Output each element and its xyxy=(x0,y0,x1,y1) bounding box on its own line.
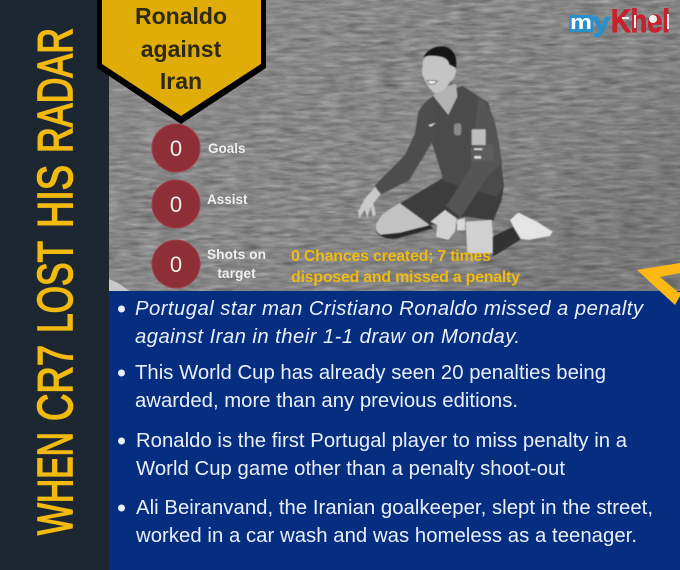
bullet: first Portugal player: World Cup game other than a penalty shoot-out xyxy=(136,458,565,480)
bullet: first Portugal player xyxy=(118,430,628,480)
crest and swoosh xyxy=(454,123,461,135)
logo: myKhel: Khel xyxy=(611,3,670,39)
decorative yellow triangle xyxy=(637,263,680,305)
photo: kneeling Ronaldo xyxy=(358,47,553,257)
bullet: Ronaldo missed a penalty: against Iran in their 1-1 draw on Monday. xyxy=(135,326,520,348)
heading: vertical title: HIS xyxy=(28,165,83,228)
stat: assist xyxy=(152,180,248,228)
photo: grass pitch background xyxy=(109,0,680,292)
bullet: first Portugal player: Ronaldo is the first Portugal player to miss penalty in a xyxy=(136,430,628,452)
pennant: Ronaldo against Iran: against xyxy=(141,36,222,62)
bullet: 20 penalties awarded xyxy=(118,362,606,412)
stat: goals: 0 xyxy=(170,136,182,161)
bullet: 20 penalties awarded: awarded, more than any previous editions. xyxy=(135,390,518,412)
left thigh and knee xyxy=(376,203,430,237)
stat: goals: Goals xyxy=(208,141,246,156)
viewer-right arm xyxy=(446,97,502,217)
stat: goals xyxy=(152,124,246,172)
callout: chances created: 0 Chances created; 7 times xyxy=(291,248,491,265)
pennant: Ronaldo against Iran: Iran xyxy=(160,68,202,94)
bullet: Ali Beiranvand: worked in a car wash and was homeless as a teenager. xyxy=(135,525,637,547)
callout: chances created xyxy=(291,248,520,286)
torso xyxy=(418,86,504,197)
bullet: Ali Beiranvand: Ali Beiranvand, the Iranian goalkeeper, slept in the street, xyxy=(136,497,653,519)
stat: shots on target: 0 xyxy=(170,252,182,277)
pennant: Ronaldo against Iran xyxy=(97,0,266,124)
callout: chances created: disposed and missed a penalty xyxy=(291,269,520,286)
heading: vertical title xyxy=(28,28,83,535)
mouth xyxy=(427,80,437,84)
pennant: Ronaldo against Iran: Ronaldo xyxy=(135,3,227,29)
boot xyxy=(510,213,553,240)
panel: title sidebar xyxy=(0,0,109,570)
bullet: Ronaldo missed a penalty xyxy=(118,298,645,348)
hair xyxy=(423,47,456,68)
heading: vertical title: LOST xyxy=(28,241,83,333)
shorts xyxy=(400,177,504,225)
stat: shots on target xyxy=(152,240,266,288)
panel: bullet facts xyxy=(109,291,680,570)
sock xyxy=(493,227,521,257)
logo: myKhel: m xyxy=(570,12,592,34)
left hand xyxy=(358,187,381,218)
heading: vertical title: CR7 xyxy=(28,345,83,421)
face xyxy=(422,54,456,93)
right thigh xyxy=(466,220,493,253)
logo: myKhel: y xyxy=(593,7,610,37)
armband and badge xyxy=(472,129,486,145)
viewer-left arm xyxy=(375,97,433,195)
bullet: Ronaldo missed a penalty: Portugal star man Cristiano Ronaldo missed a penalty xyxy=(135,298,645,320)
bullet: 20 penalties awarded: This World Cup has already seen 20 penalties being xyxy=(135,362,606,384)
right hand xyxy=(431,210,457,240)
bullet: Ali Beiranvand xyxy=(118,497,653,547)
stat: assist: 0 xyxy=(170,192,182,217)
stat: assist: Assist xyxy=(207,192,248,207)
heading: vertical title: WHEN xyxy=(28,432,83,535)
neck xyxy=(433,83,457,115)
stat: shots on target: target xyxy=(217,266,256,281)
logo: myKhel xyxy=(569,3,670,39)
stat: shots on target: Shots on xyxy=(207,247,266,262)
